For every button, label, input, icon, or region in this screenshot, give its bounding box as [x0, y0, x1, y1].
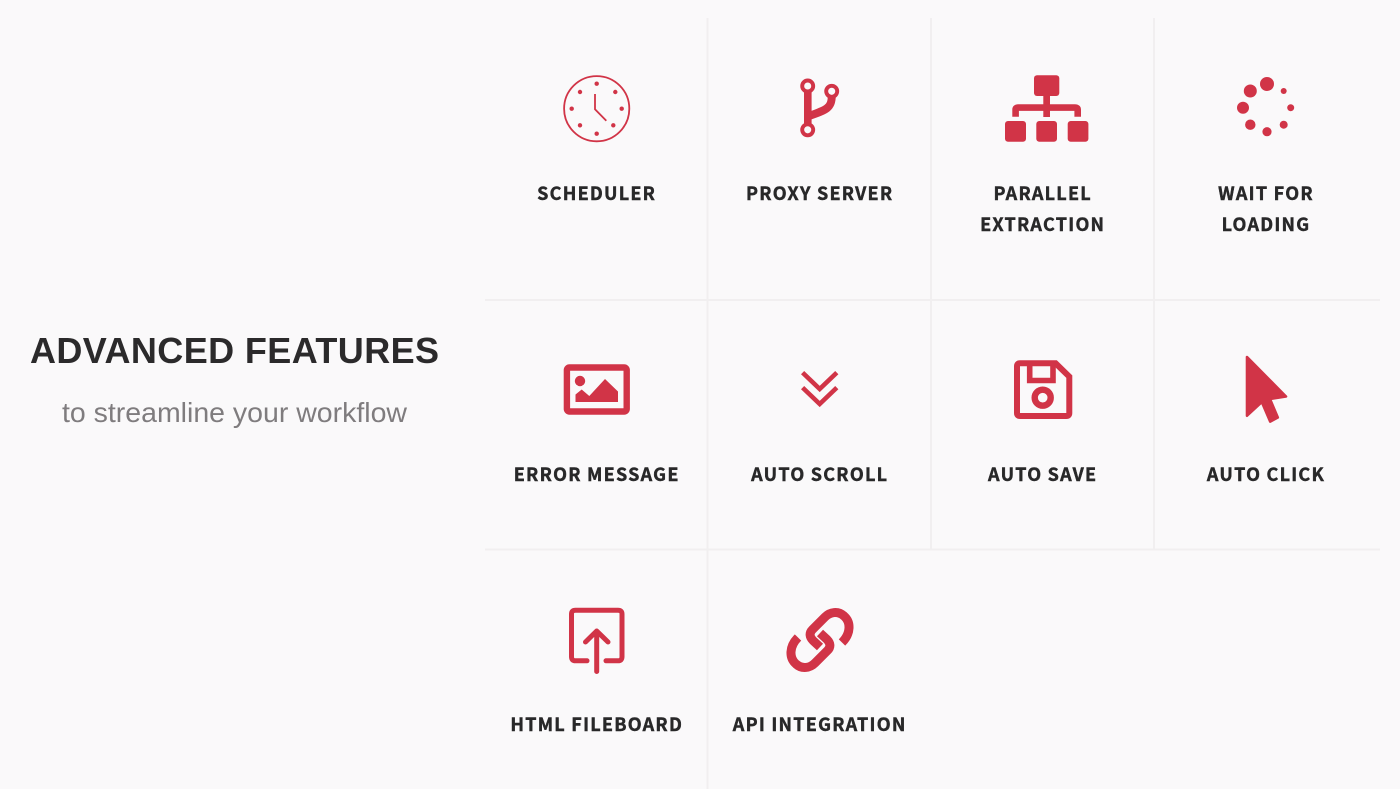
label line 2: EXTRACTION — [980, 211, 1105, 237]
feature: scheduler — [537, 76, 656, 206]
icon: hierarchy — [1005, 75, 1088, 142]
icon: clock — [564, 76, 629, 141]
label: PARALLEL — [993, 180, 1092, 206]
label: AUTO SCROLL — [750, 461, 888, 487]
icon: chain link — [791, 613, 849, 667]
heading block — [30, 330, 439, 428]
label: API INTEGRATION — [732, 711, 907, 737]
icon: cursor — [1247, 357, 1286, 422]
icon: double chevron — [803, 373, 837, 404]
feature: auto click — [1206, 357, 1325, 487]
feature: wait for loading — [1218, 77, 1314, 237]
icon: spinner — [1237, 77, 1294, 136]
label: PROXY SERVER — [746, 180, 893, 206]
feature: api integration — [732, 613, 907, 737]
label: AUTO SAVE — [987, 461, 1097, 487]
icon: branch — [802, 80, 837, 135]
icon: image — [567, 368, 627, 412]
feature: auto scroll — [750, 373, 888, 487]
feature: parallel extraction — [980, 75, 1105, 237]
feature: auto save — [987, 362, 1097, 487]
icon: floppy disk — [1017, 362, 1069, 416]
feature: html fileboard — [510, 610, 683, 737]
subtitle: to streamline your workflow — [62, 397, 408, 428]
feature: proxy server — [746, 80, 893, 206]
label: AUTO CLICK — [1206, 461, 1325, 487]
label: WAIT FOR — [1218, 180, 1314, 206]
icon: upload — [572, 610, 622, 672]
label line 2: LOADING — [1222, 211, 1310, 237]
label: SCHEDULER — [537, 180, 656, 206]
feature: error message — [514, 368, 680, 487]
title: ADVANCED FEATURES — [30, 330, 439, 371]
label: HTML FILEBOARD — [510, 711, 683, 737]
label: ERROR MESSAGE — [514, 461, 680, 487]
